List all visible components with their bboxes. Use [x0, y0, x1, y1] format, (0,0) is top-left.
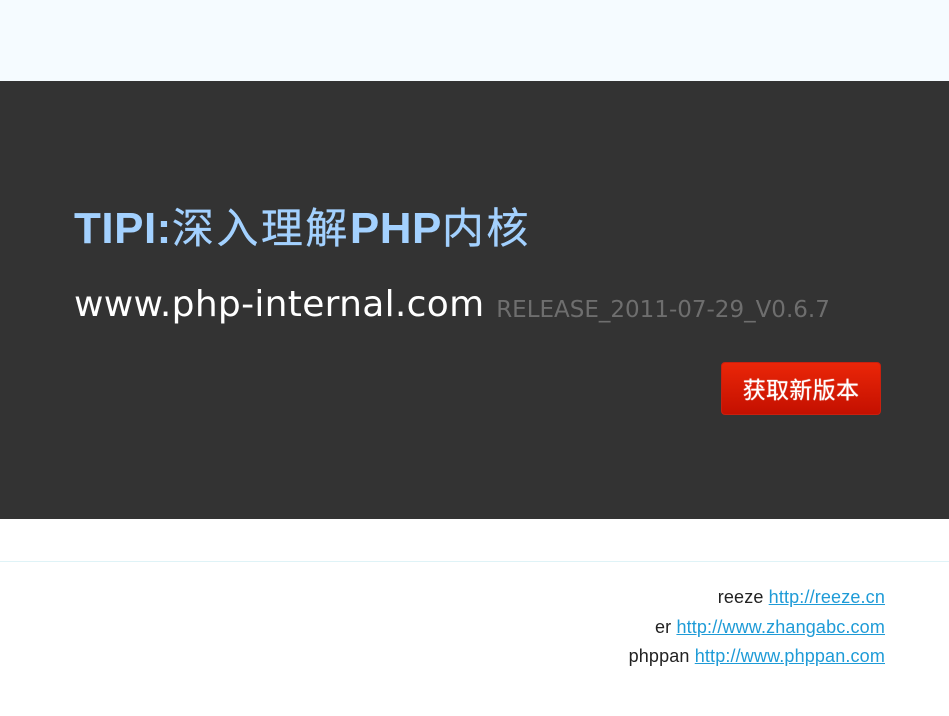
title: TIPI:深入理解PHP内核: [74, 204, 531, 253]
top band: [0, 0, 949, 81]
footer divider: [0, 561, 949, 562]
button: get new version: [721, 362, 881, 415]
credit: reeze: reeze http://reeze.cn: [718, 587, 885, 607]
dark hero panel: [0, 81, 949, 519]
site url and release version: www.php-internal.com RELEASE_2011-07-29_V0.6.7: [74, 284, 830, 325]
credit: er: er http://www.zhangabc.com: [655, 616, 885, 636]
authors credits: [629, 587, 885, 666]
credit: phppan: phppan http://www.phppan.com: [629, 646, 885, 666]
button: get new version: 获取新版本: [743, 377, 859, 403]
